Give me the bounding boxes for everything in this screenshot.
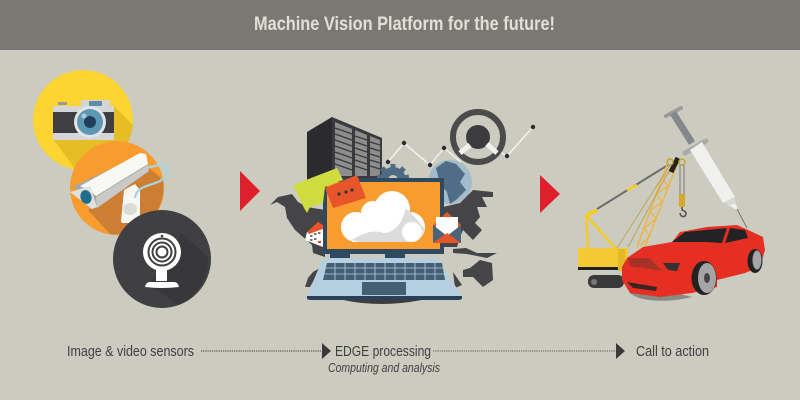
dotted connector 1 [201,350,322,352]
arrowhead 1 [322,343,331,359]
title: Machine Vision Platform for the future! [254,14,555,35]
label: image and video sensors: Image & video sensors [67,343,194,360]
chart line [386,125,535,167]
label: edge processing: EDGE processing [335,343,431,360]
header band [0,0,800,50]
cloud [341,191,425,242]
icon: security camera on orange circle [70,141,168,235]
red car [622,225,765,301]
icon: webcam on dark circle [113,210,211,308]
dotted connector 2 [433,350,616,352]
label: call to action: Call to action [636,343,709,360]
mail envelope icon [433,212,461,243]
globe [428,160,472,204]
target ring [453,112,503,162]
laptop screen [323,178,444,258]
server rack [307,117,382,180]
world map silhouette [270,190,497,288]
laptop base [307,258,462,304]
illustration: crane, syringe and car [578,108,765,301]
icon: photo camera on yellow circle [33,70,133,170]
crawler crane [578,158,686,288]
illustration: edge processing laptop [270,112,535,304]
speech bubble: orange-red [325,175,366,208]
arrow: red triangle 2 [540,175,560,213]
subtitle: computing and analysis: Computing and analysis [328,361,440,375]
arrowhead 2 [616,343,625,359]
syringe [666,108,747,228]
speech bubble: lime [293,168,343,213]
wheels [692,261,716,295]
gear [377,164,409,193]
calendar icon [305,222,323,247]
arrow: red triangle 1 [240,171,260,211]
boom [637,162,678,247]
